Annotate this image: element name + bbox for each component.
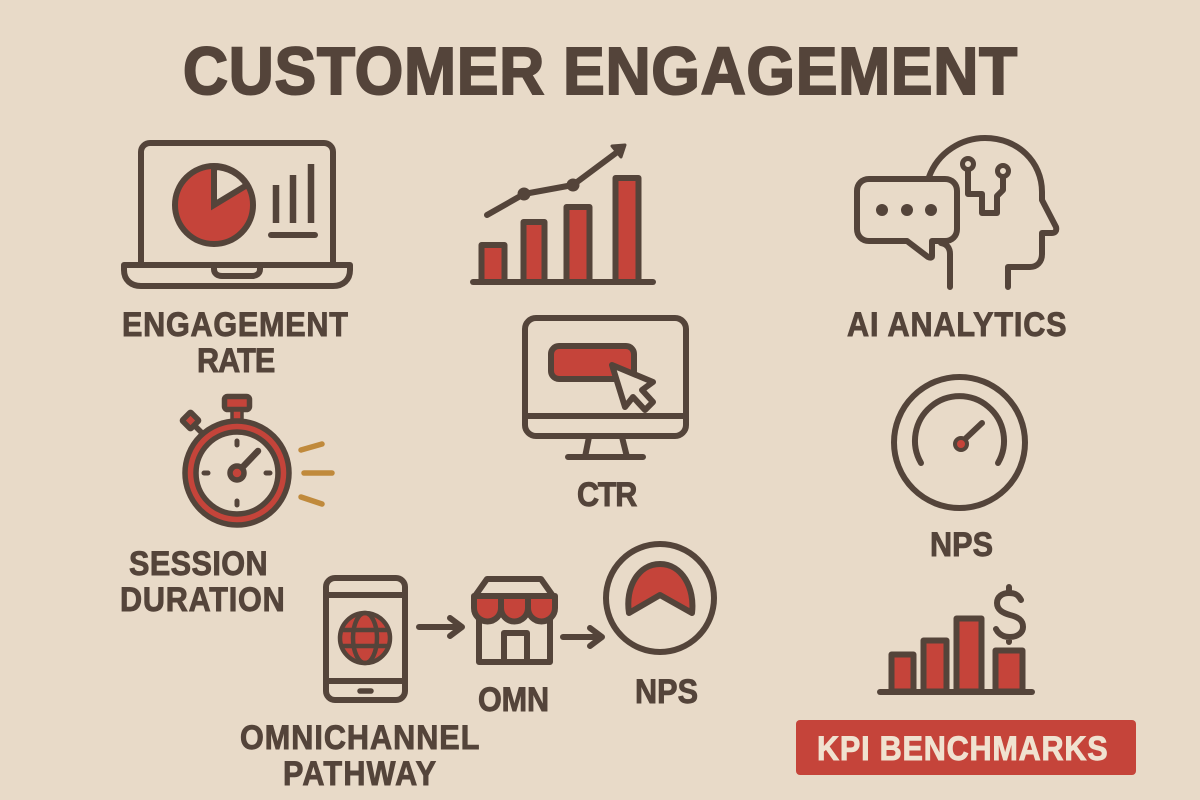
icon: head with chat bubble xyxy=(857,138,1056,287)
label: engagement rate: RATE xyxy=(197,342,275,379)
panel: NPS gauge xyxy=(894,377,1025,563)
label: AI analytics: AI ANALYTICS xyxy=(847,306,1067,343)
label: NPS small: NPS xyxy=(635,673,698,710)
icon: gauge xyxy=(894,377,1025,508)
label: NPS: NPS xyxy=(930,526,993,563)
arrow: store to NPS xyxy=(563,628,602,646)
icon: stopwatch xyxy=(182,396,332,525)
panel: omnichannel pathway xyxy=(240,544,714,792)
title: CUSTOMER ENGAGEMENT xyxy=(183,33,1017,108)
label: omnichannel pathway: OMNICHANNEL xyxy=(240,719,479,756)
panel: AI analytics xyxy=(847,138,1067,343)
label: session duration: DURATION xyxy=(120,581,285,618)
label: omnichannel pathway xyxy=(240,719,479,792)
icon: monitor with button and cursor xyxy=(525,318,686,457)
icon: smartphone with globe xyxy=(326,578,405,700)
label: CTR: CTR xyxy=(577,476,637,513)
label: engagement rate xyxy=(122,306,348,379)
panel: CTR xyxy=(525,318,686,513)
label: engagement rate: ENGAGEMENT xyxy=(122,306,348,343)
icon: storefront xyxy=(474,579,555,662)
icon: NPS arc circle xyxy=(606,544,714,652)
label: session duration xyxy=(120,545,285,618)
panel: KPI benchmarks xyxy=(796,587,1136,775)
badge: KPI benchmarks: KPI BENCHMARKS xyxy=(817,730,1108,767)
badge: KPI benchmarks xyxy=(796,720,1136,775)
panel: engagement rate xyxy=(122,143,350,379)
label: omnichannel pathway: PATHWAY xyxy=(283,755,436,792)
arrow: phone to store xyxy=(419,618,462,636)
label: session duration: SESSION xyxy=(129,545,268,582)
panel: click growth chart xyxy=(473,145,653,282)
bar chart with trend arrow xyxy=(473,145,653,282)
icon: bars with dollar sign xyxy=(880,587,1032,692)
icon: laptop with pie chart xyxy=(124,143,350,286)
panel: session duration xyxy=(120,396,332,618)
label: OMN: OMN xyxy=(478,681,549,718)
